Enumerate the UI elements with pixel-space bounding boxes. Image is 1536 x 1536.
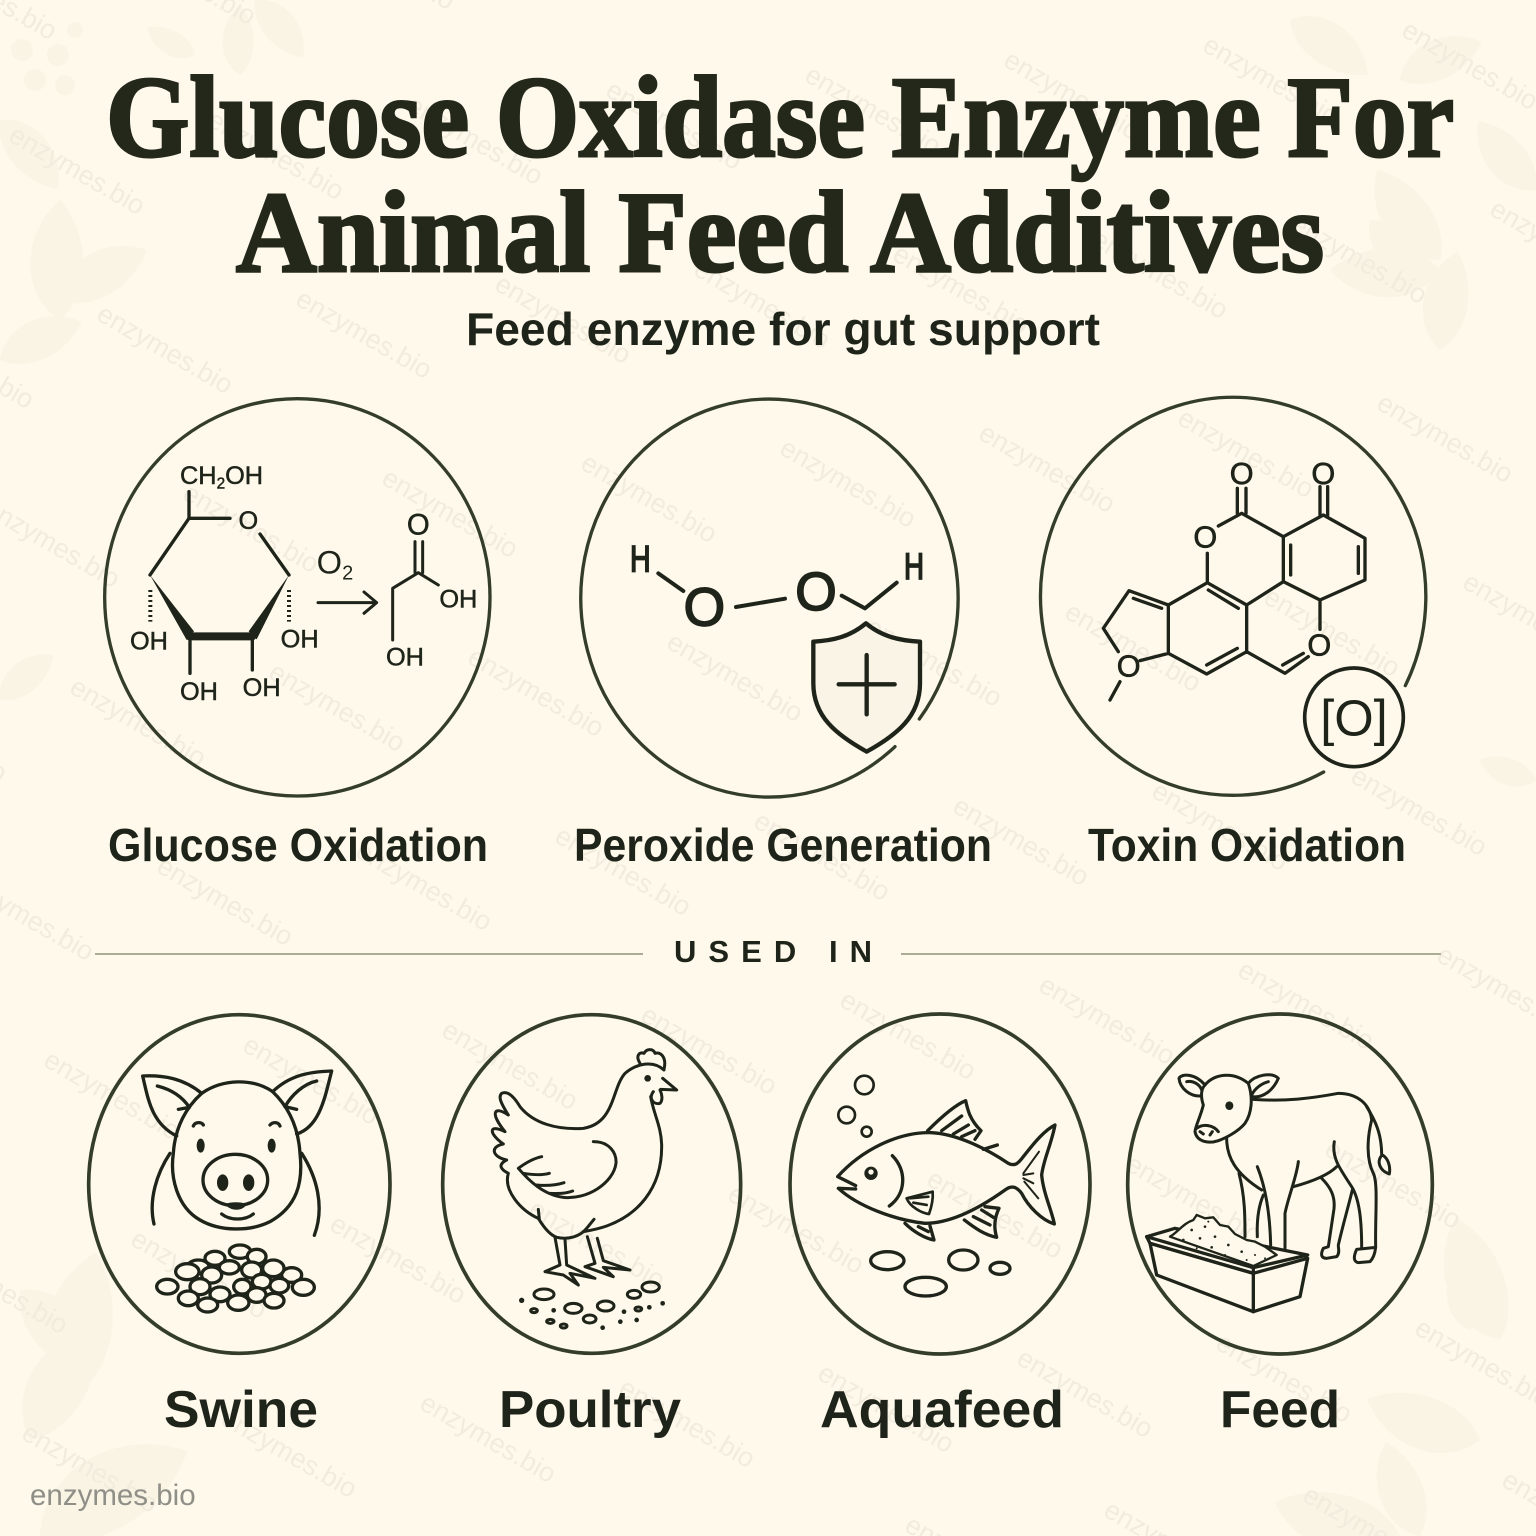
watermark pattern: enzymes.bio <box>576 447 722 549</box>
watermark pattern: enzymes.bio <box>775 432 921 534</box>
watermark pattern: enzymes.bio <box>1259 581 1405 683</box>
icon: scattered grains <box>519 1282 665 1330</box>
feed ring outline <box>1128 1014 1432 1354</box>
watermark pattern: enzymes.bio <box>1286 208 1432 310</box>
watermark pattern: enzymes.bio <box>65 671 211 773</box>
aquafeed ring outline <box>790 1014 1090 1354</box>
watermark pattern: enzymes.bio <box>922 1163 1068 1265</box>
glucose ring molecule: 2 <box>217 476 225 493</box>
watermark pattern: enzymes.bio <box>126 1223 272 1325</box>
icon: feed pellets <box>871 1250 1010 1296</box>
watermark pattern: enzymes.bio <box>948 790 1094 892</box>
watermark pattern: enzymes.bio <box>524 1193 670 1295</box>
panel: aquafeed <box>790 1014 1090 1354</box>
watermark pattern: enzymes.bio <box>1198 29 1344 131</box>
icon: hen <box>492 1050 677 1285</box>
panel: peroxide generation <box>581 399 958 797</box>
gluconic acid product: O <box>407 508 430 541</box>
icon: pig head <box>143 1071 332 1235</box>
watermark pattern: enzymes.bio <box>415 1387 561 1489</box>
footer brand: enzymes.bio <box>30 1479 196 1512</box>
gluconic acid product <box>386 508 477 671</box>
watermark pattern: enzymes.bio <box>601 74 747 176</box>
icon: fish <box>838 1101 1055 1240</box>
badge: oxygen radical <box>1305 668 1403 767</box>
title: Animal Feed Additives <box>236 169 1324 297</box>
peroxide ring outline <box>581 399 958 797</box>
watermark pattern: enzymes.bio <box>377 462 523 564</box>
aflatoxin molecule: O <box>1307 629 1331 663</box>
watermark pattern: enzymes.bio <box>1372 387 1518 489</box>
label: aquafeed: Aquafeed <box>820 1381 1064 1439</box>
watermark pattern: enzymes.bio <box>203 104 349 206</box>
glucose ring molecule: O <box>238 507 258 535</box>
aflatoxin molecule: O <box>1117 650 1141 684</box>
watermark pattern: enzymes.bio <box>974 417 1120 519</box>
gluconic acid product: OH <box>386 643 424 671</box>
watermark pattern: enzymes.bio <box>1320 1133 1466 1235</box>
watermark pattern: enzymes.bio <box>402 89 548 191</box>
watermark pattern: enzymes.bio <box>437 1014 583 1116</box>
watermark pattern: enzymes.bio <box>4 119 150 221</box>
watermark pattern: enzymes.bio <box>351 835 497 937</box>
panel: poultry <box>443 1015 741 1353</box>
watermark pattern: enzymes.bio <box>216 1402 362 1504</box>
watermark pattern: enzymes.bio <box>749 805 895 907</box>
icon: bubbles <box>838 1076 874 1137</box>
reaction arrow with oxygen: 2 <box>342 562 353 584</box>
watermark pattern: enzymes.bio <box>888 238 1034 340</box>
watermark pattern: enzymes.bio <box>463 641 609 743</box>
watermark pattern: enzymes.bio <box>1147 775 1293 877</box>
watermark pattern: enzymes.bio <box>92 298 238 400</box>
badge: oxygen radical: [O] <box>1320 690 1388 747</box>
watermark pattern: enzymes.bio <box>1173 402 1319 504</box>
watermark pattern: enzymes.bio <box>17 1417 163 1519</box>
hydrogen peroxide molecule: O <box>795 563 837 622</box>
glucose ring molecule: OH <box>180 678 218 706</box>
watermark pattern: enzymes.bio <box>1211 1327 1357 1429</box>
panel: swine <box>89 1015 390 1353</box>
watermark pattern: enzymes.bio <box>1034 969 1180 1071</box>
watermark pattern: enzymes.bio <box>325 1208 471 1310</box>
glucose ring molecule <box>130 462 319 706</box>
watermark pattern: enzymes.bio <box>1346 760 1492 862</box>
toxin ring outline <box>1041 397 1426 795</box>
watermark pattern: enzymes.bio <box>813 1357 959 1459</box>
label: swine: Swine <box>164 1381 318 1439</box>
watermark pattern: enzymes.bio <box>1233 954 1379 1056</box>
watermark pattern: enzymes.bio <box>689 253 835 355</box>
gluconic acid product: OH <box>439 585 477 613</box>
reaction arrow with oxygen: O <box>317 543 342 580</box>
icon: feed pellets pile <box>157 1245 314 1312</box>
watermark pattern: enzymes.bio <box>238 1029 384 1131</box>
label: feed: Feed <box>1220 1381 1340 1439</box>
watermark pattern: enzymes.bio <box>39 1044 185 1146</box>
poultry ring outline <box>443 1015 741 1353</box>
label: peroxide generation: Peroxide Generation <box>574 819 992 871</box>
glucose ring molecule: CH <box>180 462 217 490</box>
glucose ring outline <box>105 399 490 796</box>
glucose ring molecule: OH <box>130 627 168 655</box>
aflatoxin molecule: O <box>1311 457 1335 491</box>
watermark pattern: enzymes.bio <box>490 268 636 370</box>
title: Glucose Oxidase Enzyme For <box>106 54 1454 182</box>
watermark pattern: enzymes.bio <box>1121 1148 1267 1250</box>
watermark pattern: enzymes.bio <box>178 477 324 579</box>
label: glucose oxidation: Glucose Oxidation <box>108 819 488 871</box>
watermark pattern: enzymes.bio <box>152 850 298 952</box>
aflatoxin molecule: O <box>1230 457 1254 491</box>
panel: feed <box>1128 1014 1432 1354</box>
title <box>106 54 1454 297</box>
aflatoxin molecule <box>1103 457 1365 700</box>
watermark pattern: enzymes.bio <box>861 611 1007 713</box>
watermark pattern: enzymes.bio <box>1060 596 1206 698</box>
glucose ring molecule: OH <box>243 674 281 702</box>
glucose ring molecule: OH <box>225 462 263 490</box>
watermark pattern: enzymes.bio <box>1012 1342 1158 1444</box>
hydrogen peroxide molecule: O <box>684 578 725 637</box>
watermark pattern: enzymes.bio <box>662 626 808 728</box>
glucose ring molecule: OH <box>281 625 319 653</box>
watermark pattern: enzymes.bio <box>550 820 696 922</box>
watermark pattern: enzymes.bio <box>999 44 1145 146</box>
watermark pattern: enzymes.bio <box>614 1372 760 1474</box>
section divider: used in: USED IN <box>674 934 872 969</box>
watermark pattern: enzymes.bio <box>291 283 437 385</box>
label: poultry: Poultry <box>499 1381 681 1439</box>
watermark pattern: enzymes.bio <box>800 59 946 161</box>
icon: calf <box>1179 1075 1390 1263</box>
aflatoxin molecule: O <box>1193 521 1217 555</box>
hydrogen peroxide molecule: H <box>904 546 924 587</box>
hydrogen peroxide molecule: H <box>630 539 651 580</box>
panel: toxin oxidation <box>1041 397 1426 795</box>
watermark pattern: enzymes.bio <box>636 999 782 1101</box>
icon: feed trough <box>1147 1215 1308 1312</box>
watermark pattern: enzymes.bio <box>835 984 981 1086</box>
reaction arrow with oxygen <box>317 543 377 613</box>
hydrogen peroxide molecule <box>630 539 924 637</box>
watermark pattern: enzymes.bio <box>1087 223 1233 325</box>
watermark pattern: enzymes.bio <box>723 1178 869 1280</box>
panel: glucose oxidation <box>105 399 490 796</box>
subtitle: Feed enzyme for gut support <box>466 303 1100 355</box>
swine ring outline <box>89 1015 390 1353</box>
icon: shield with plus <box>813 623 920 752</box>
watermark pattern: enzymes.bio <box>264 656 410 758</box>
label: toxin oxidation: Toxin Oxidation <box>1088 819 1406 871</box>
